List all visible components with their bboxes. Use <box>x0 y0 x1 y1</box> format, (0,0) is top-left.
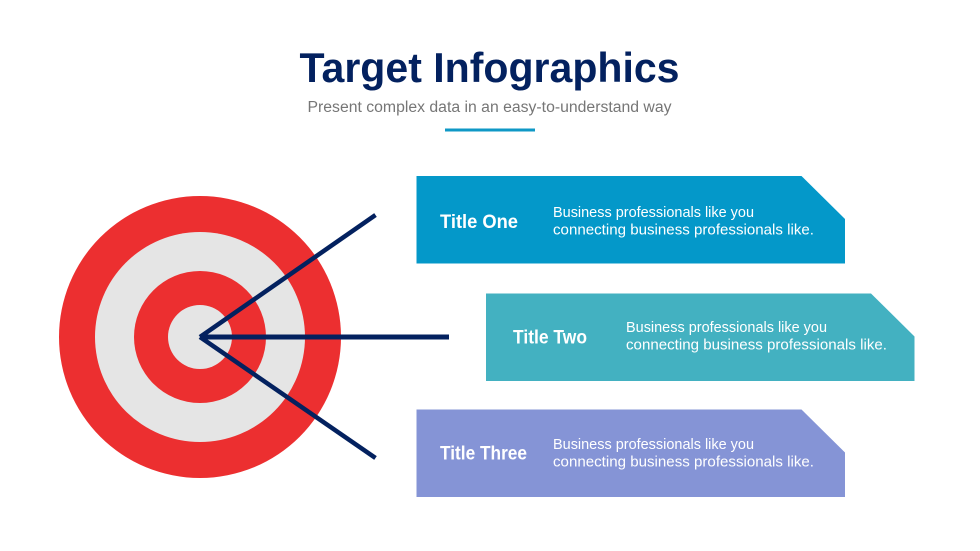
pointer line to Title Two <box>200 334 449 340</box>
target: outer grey ring <box>95 232 305 442</box>
panel background <box>486 294 914 381</box>
panel body text: connecting business professionals like. <box>553 454 814 470</box>
target: outer red ring <box>59 196 341 478</box>
panel body text: Business professionals like you <box>626 320 827 336</box>
panel: Title One <box>416 176 845 264</box>
target icon with pointer lines <box>59 196 449 478</box>
header <box>300 44 680 132</box>
panel heading: Title Three <box>440 444 527 464</box>
panel: Title Three <box>416 410 845 497</box>
panel body text: Business professionals like you <box>553 205 754 221</box>
panel: Title Two <box>486 294 914 381</box>
panel body text: connecting business professionals like. <box>553 222 814 238</box>
target: inner red ring <box>134 271 266 403</box>
panel body text: Business professionals like you <box>553 437 754 453</box>
panel body text: connecting business professionals like. <box>626 338 887 354</box>
title: Target Infographics <box>300 44 680 91</box>
subtitle: Present complex data in an easy-to-understand way <box>308 99 672 116</box>
target: bullseye <box>168 305 232 369</box>
panel heading: Title One <box>440 212 518 233</box>
panel heading: Title Two <box>513 328 587 348</box>
pointer line to Title Three <box>200 337 376 458</box>
panel background <box>416 410 845 497</box>
panel background <box>416 176 845 264</box>
pointer line to Title One <box>200 215 376 337</box>
title underline <box>445 128 535 132</box>
